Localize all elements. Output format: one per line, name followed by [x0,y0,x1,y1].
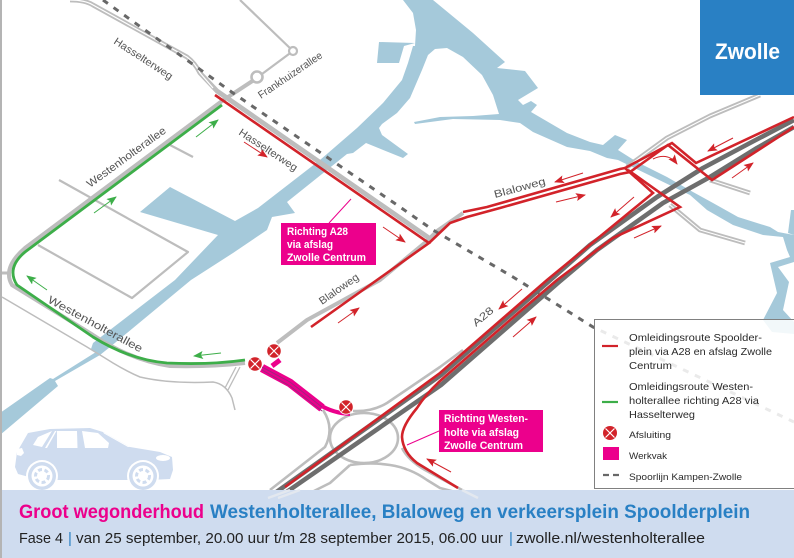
subheading: dates and url [19,530,705,547]
subheading: dates and url: | [68,530,72,547]
road: Blaloweg [277,213,463,343]
label: Westenholterallee north: Westenholterallee [85,125,169,190]
label: Hasselterweg south: Hasselterweg [236,126,300,174]
water: canals and river [0,0,794,435]
roundabout: Frankhuizerallee small [289,47,297,55]
work zone: main section [262,368,322,408]
route: ramp south-east [402,170,680,488]
road: side streets [38,145,193,298]
road: crossing lower east [710,180,750,193]
subheading: dates and url: zwolle.nl/westenholterallee [516,530,705,547]
route: ramp north-east [625,117,794,168]
motorway: northern carriageway [268,120,794,498]
railway: Spoorlijn Kampen-Zwolle [103,0,794,422]
callout: Richting A28: Richting A28 [287,226,348,238]
callout: Richting Westenholte: Richting Westen- [444,413,528,425]
callout: Richting Westenholte: holte via afslag [444,427,519,439]
route: Hasselterweg [215,95,429,327]
roundabout Spoolderplein [330,413,398,463]
legend: red route: plein via A28 en afslag Zwolle [629,346,772,358]
road labels [46,35,547,355]
legend: green route: Hasselterweg [629,409,695,421]
icon: car [15,428,173,492]
subheading: dates and url: Fase 4 [19,530,63,547]
road: Westenholterallee [9,78,257,366]
label: Blaloweg east: Blaloweg [493,176,547,201]
road: stub west [2,272,8,274]
legend: work zone [603,447,667,462]
heading: blue part: Westenholterallee, Blaloweg en verkeersplein Spoolderplein [210,501,750,523]
route: Westenholterallee green [13,105,245,364]
label: Frankhuizerallee: Frankhuizerallee [256,50,325,101]
roundabout: Frankhuizerallee large [252,72,262,82]
legend: closure: Afsluiting [629,430,671,441]
motorway: southern carriageway [278,127,794,498]
work zone [262,360,350,414]
road: Blaloweg east inner line [627,95,760,167]
callout: Richting Westenholte [407,410,543,452]
label: A28: A28 [470,305,496,329]
work zone: road inside [262,367,322,411]
callout: Richting A28 [281,199,376,265]
left edge stripe [0,0,2,558]
road: crossing lower east inner line [710,180,750,193]
closure markers [248,344,353,414]
legend panel [594,320,794,488]
road: Hasselterweg [70,0,429,238]
label: Blaloweg west: Blaloweg [317,271,362,307]
legend: closure [603,426,671,441]
route: Blaloweg south [429,127,794,243]
callout: Richting Westenholte: Zwolle Centrum [444,440,523,452]
legend: red route: Centrum [629,360,672,372]
callout: Richting A28: Zwolle Centrum [287,252,366,264]
road: crossing lower inner line [670,205,745,243]
detour route: red [215,95,794,488]
road: Blaloweg east [627,95,760,167]
closure: north [267,344,281,358]
legend: green route [602,381,759,421]
label: Hasselterweg north: Hasselterweg [111,35,175,83]
legend: railway: Spoorlijn Kampen-Zwolle [629,472,742,483]
road: lower Westenholterallee service road [2,297,235,410]
road: Frankhuizerallee [240,0,293,74]
direction arrows: red [244,138,753,472]
roundabout approach roads [270,350,478,498]
work zone: tail [320,405,350,414]
badge: Zwolle: Zwolle [715,39,780,64]
heading: pink part: Groot wegonderhoud [19,501,204,523]
road: crossing lower [670,205,745,243]
label: Westenholterallee south: Westenholterallee [46,294,144,355]
legend: red route: Omleidingsroute Spoolder- [629,332,763,344]
closure: east [339,400,353,414]
road: side connector [225,367,240,390]
route: Blaloweg north [285,168,653,487]
legend: red route [602,332,772,372]
road: Hasselterweg inner line [70,0,213,88]
work zone: stub [272,360,280,366]
closure: west [248,357,262,371]
subheading: dates and url: | [509,530,513,547]
motorway and road tips over banner [268,490,478,498]
subheading: dates and url: van 25 september, 20.00 uur t/m 28 september 2015, 06.00 uur [76,530,503,547]
callout: Richting A28: via afslag [287,239,333,251]
legend: work zone: Werkvak [629,451,667,462]
direction arrows: green [27,120,221,356]
legend: green route: Omleidingsroute Westen- [629,381,754,393]
bottom banner [2,490,794,558]
legend: green route: holterallee richting A28 via [629,395,759,407]
motorway A28 [268,120,794,498]
badge: Zwolle [700,0,794,95]
